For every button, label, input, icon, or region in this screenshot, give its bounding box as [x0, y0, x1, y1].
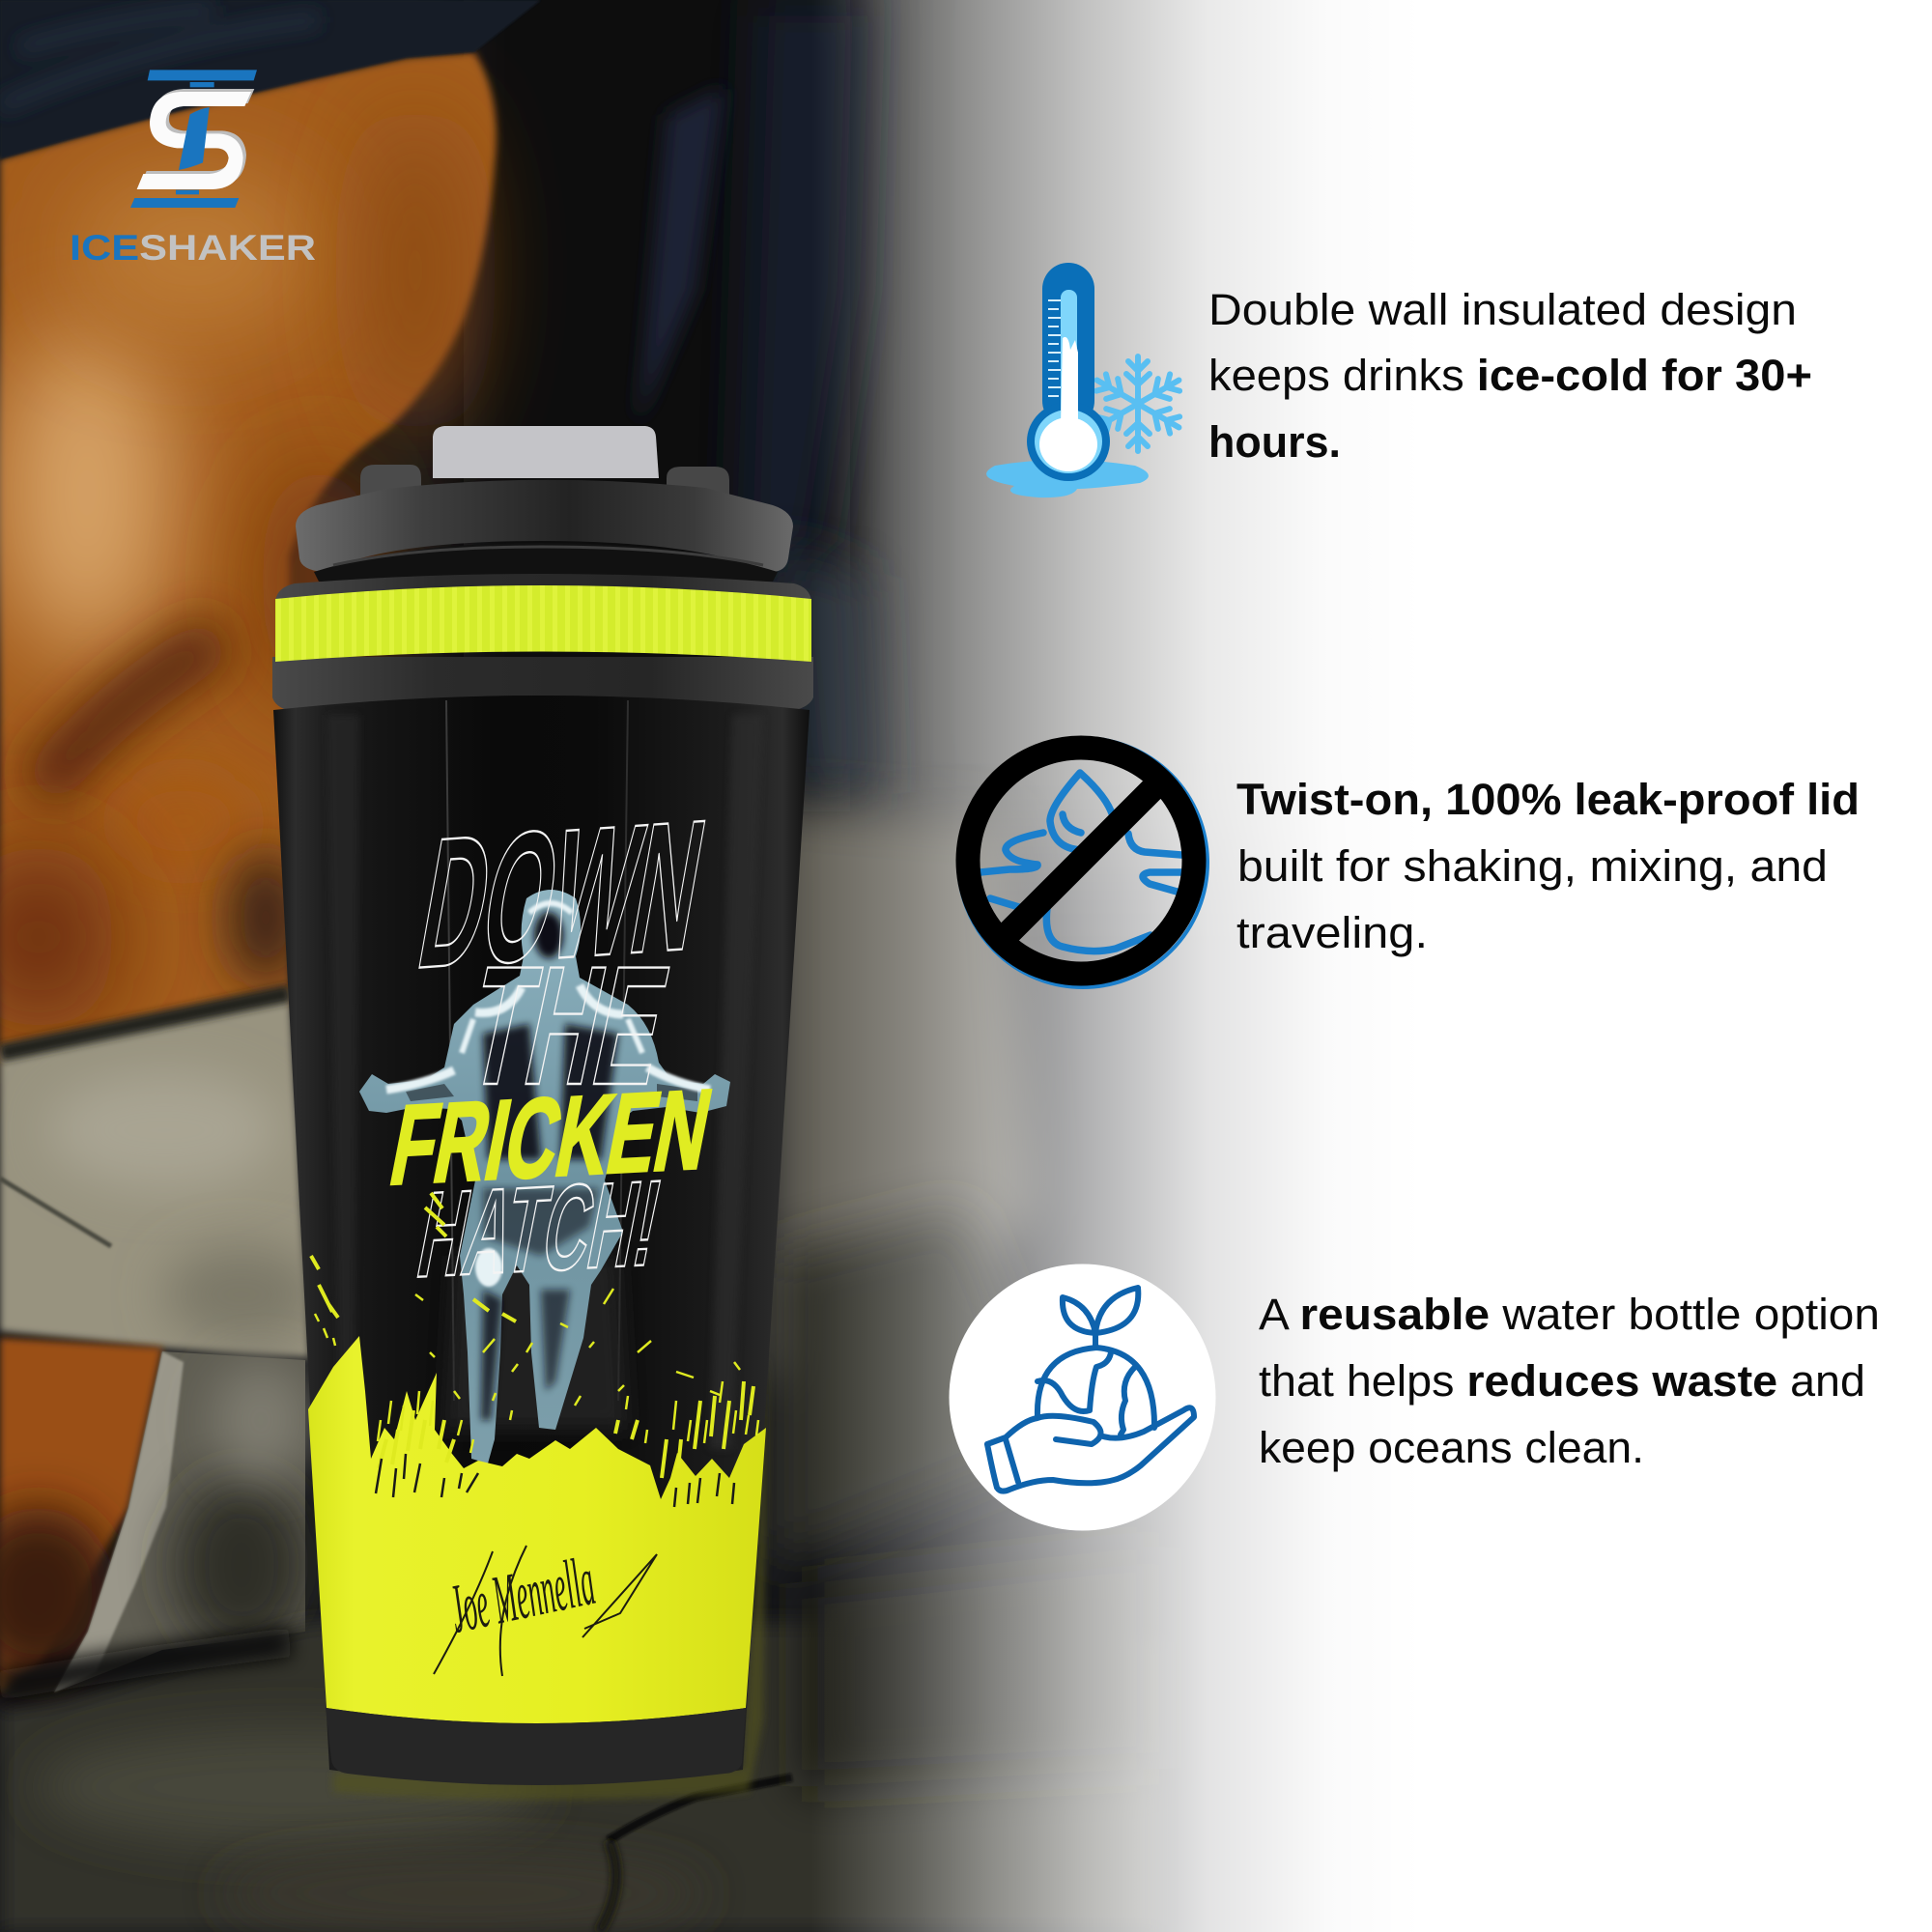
- icon: no-leak sign: [958, 738, 1208, 987]
- signature: [434, 1544, 657, 1676]
- lid tab: [433, 426, 659, 478]
- lid rim line: [333, 547, 763, 565]
- couch: [0, 1623, 1159, 1932]
- shirt top-left: [0, 0, 541, 159]
- shirt and grey wall behind: [453, 0, 1189, 867]
- logo: [70, 70, 316, 268]
- figure shadow modelling: [406, 912, 697, 1420]
- collar top: [275, 574, 811, 618]
- lid nub left: [360, 465, 421, 502]
- lettering THE: THE: [454, 931, 683, 1121]
- athlete figure: [359, 890, 730, 1463]
- text: leak-proof: Twist-on, 100% leak-proof lid: [1236, 775, 1860, 824]
- feature: leak-proof: [958, 738, 1860, 987]
- thermometer: [1027, 263, 1110, 481]
- lid nub right: [667, 467, 729, 502]
- body reflections: [327, 700, 763, 1449]
- bottle: [272, 426, 813, 1801]
- text: insulation: Double wall insulated design: [1208, 285, 1797, 334]
- paint splatter: [311, 1193, 758, 1478]
- base band: [326, 1708, 746, 1785]
- yellow paint brush area: [308, 1336, 766, 1723]
- text: reusable: A reusable water bottle option: [1259, 1290, 1880, 1339]
- lid gap: [314, 543, 778, 582]
- text: insulation: keeps drinks ice-cold for 30+: [1208, 351, 1812, 400]
- icon: hand holding earth: [949, 1264, 1215, 1530]
- puddle: [986, 460, 1149, 497]
- signature: Joe Mennella: [443, 1544, 601, 1648]
- text: leak-proof: traveling.: [1236, 908, 1428, 957]
- text: leak-proof: built for shaking, mixing, and: [1237, 841, 1828, 891]
- icon: thermometer and snowflake: [986, 263, 1184, 497]
- lid: [296, 480, 793, 572]
- text: leak-proof: [1236, 775, 1860, 957]
- text: reusable: that helps reduces waste and: [1259, 1356, 1865, 1406]
- leg: [0, 1338, 162, 1692]
- feature: reusable: [949, 1264, 1880, 1530]
- black dents in paint: [376, 1454, 734, 1507]
- bottle body: [273, 696, 810, 1784]
- text: insulation: [1208, 285, 1812, 467]
- snowflake: [1092, 356, 1184, 451]
- yellow ridged band: [275, 585, 811, 662]
- figure highlights: [386, 903, 710, 1287]
- logo wordmark: ICE SHAKER: [70, 228, 316, 268]
- feature: insulation: [986, 263, 1812, 497]
- lettering DOWN: DOWN: [407, 780, 718, 1008]
- shorts right: [765, 777, 1072, 1804]
- text: insulation: hours.: [1208, 417, 1341, 467]
- text: reusable: [1259, 1290, 1880, 1472]
- lettering FRICKEN: FRICKEN: [382, 1065, 721, 1208]
- background photo: [0, 0, 1310, 1932]
- shorts flap: [54, 1351, 309, 1692]
- text: reusable: keep oceans clean.: [1259, 1423, 1644, 1472]
- collar lower: [272, 657, 813, 711]
- lettering HATCH: HATCH!: [409, 1154, 671, 1303]
- shorts left: [0, 990, 319, 1357]
- leak lines: [958, 738, 1208, 987]
- ban ring and slash: [968, 748, 1194, 974]
- bottle shadow strip: [333, 1352, 768, 1801]
- arm: [0, 52, 497, 1063]
- logo mark: [130, 70, 257, 208]
- white fade panel: [811, 0, 1420, 1932]
